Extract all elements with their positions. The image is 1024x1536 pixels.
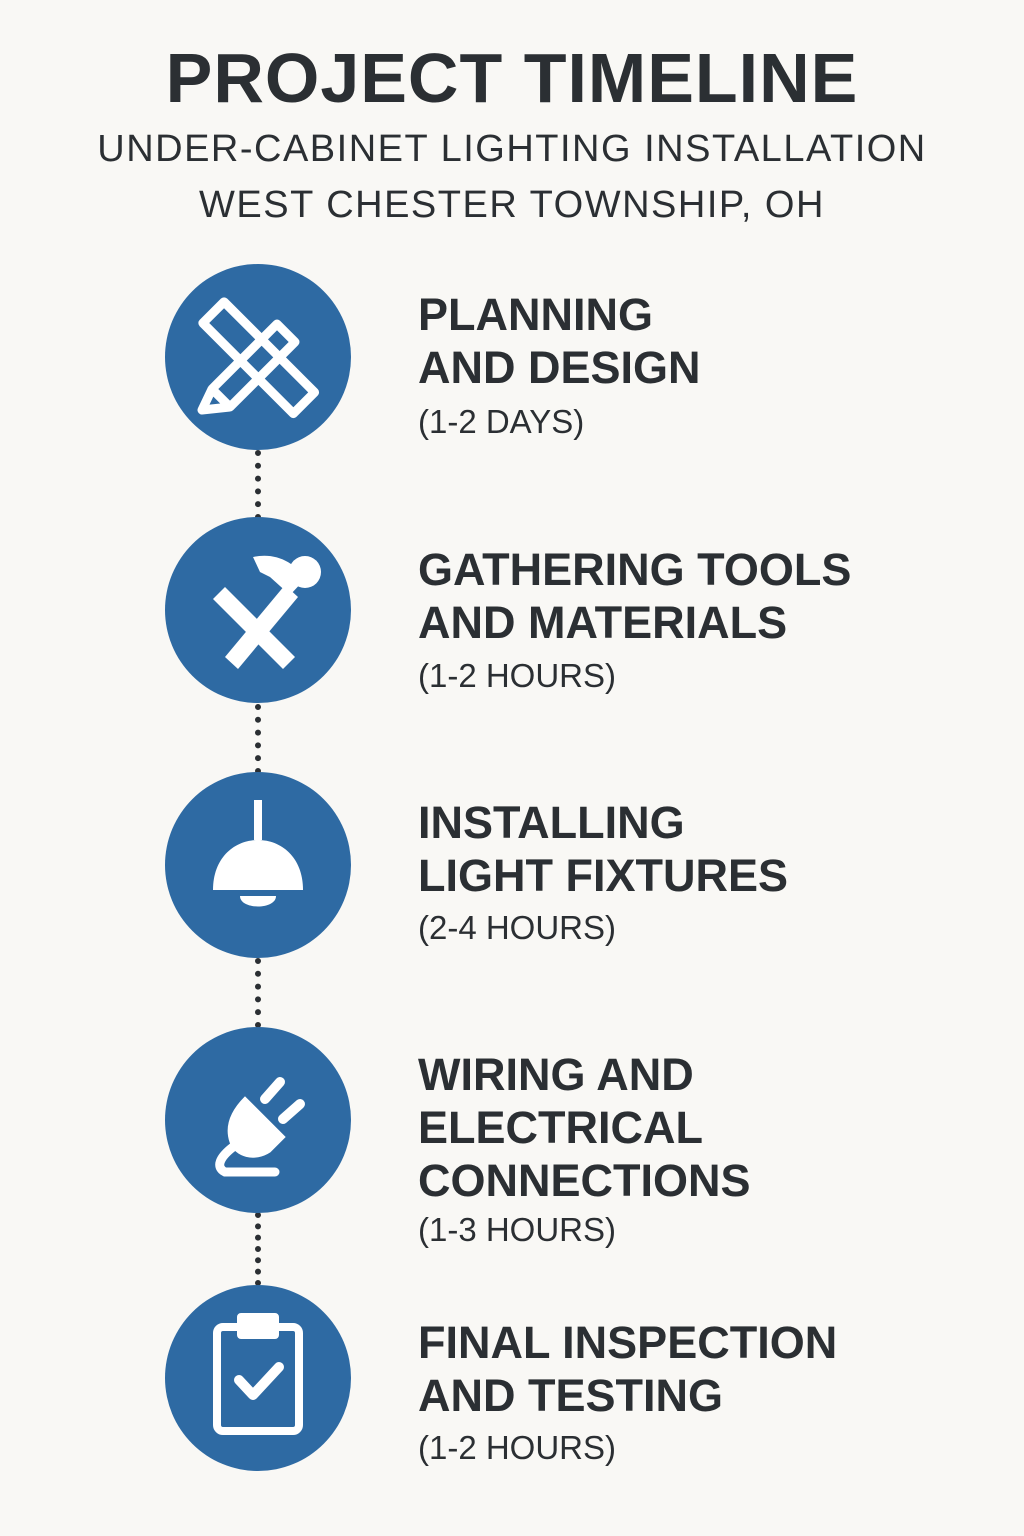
step 5 text: FINAL INSPECTION xyxy=(418,1317,837,1368)
step 1 text xyxy=(418,289,701,393)
step 1 text: PLANNING xyxy=(418,289,653,340)
subtitle: UNDER-CABINET LIGHTING INSTALLATION xyxy=(97,128,927,170)
step 4 text: ELECTRICAL xyxy=(418,1102,703,1153)
step 4 text: WIRING AND xyxy=(418,1049,694,1100)
step 5 text xyxy=(418,1317,837,1421)
icon: clipboard xyxy=(165,1285,351,1471)
step 3 text xyxy=(418,797,788,901)
icon: ruler and pencil xyxy=(165,264,351,450)
step 4 text: CONNECTIONS xyxy=(418,1155,751,1206)
text: (1-2 DAYS) xyxy=(418,403,584,440)
step 3 text: INSTALLING xyxy=(418,797,685,848)
icon: hammer and wrench xyxy=(165,517,351,703)
text: (1-2 HOURS) xyxy=(418,657,616,694)
connector dots xyxy=(255,450,267,520)
text: (2-4 HOURS) xyxy=(418,909,616,946)
icon: plug xyxy=(165,1027,351,1213)
step 1 text: AND DESIGN xyxy=(418,342,701,393)
subtitle xyxy=(97,128,927,226)
subtitle: WEST CHESTER TOWNSHIP, OH xyxy=(199,184,825,226)
step 2 text xyxy=(418,544,851,648)
step 3 text: LIGHT FIXTURES xyxy=(418,850,788,901)
text: (1-3 HOURS) xyxy=(418,1211,616,1248)
step 4 text xyxy=(418,1049,751,1206)
text: (1-2 HOURS) xyxy=(418,1429,616,1466)
icon: pendant lamp xyxy=(165,772,351,958)
step 5 text: AND TESTING xyxy=(418,1370,723,1421)
title: PROJECT TIMELINE xyxy=(166,39,858,117)
step 2 text: GATHERING TOOLS xyxy=(418,544,851,595)
step 2 text: AND MATERIALS xyxy=(418,597,787,648)
